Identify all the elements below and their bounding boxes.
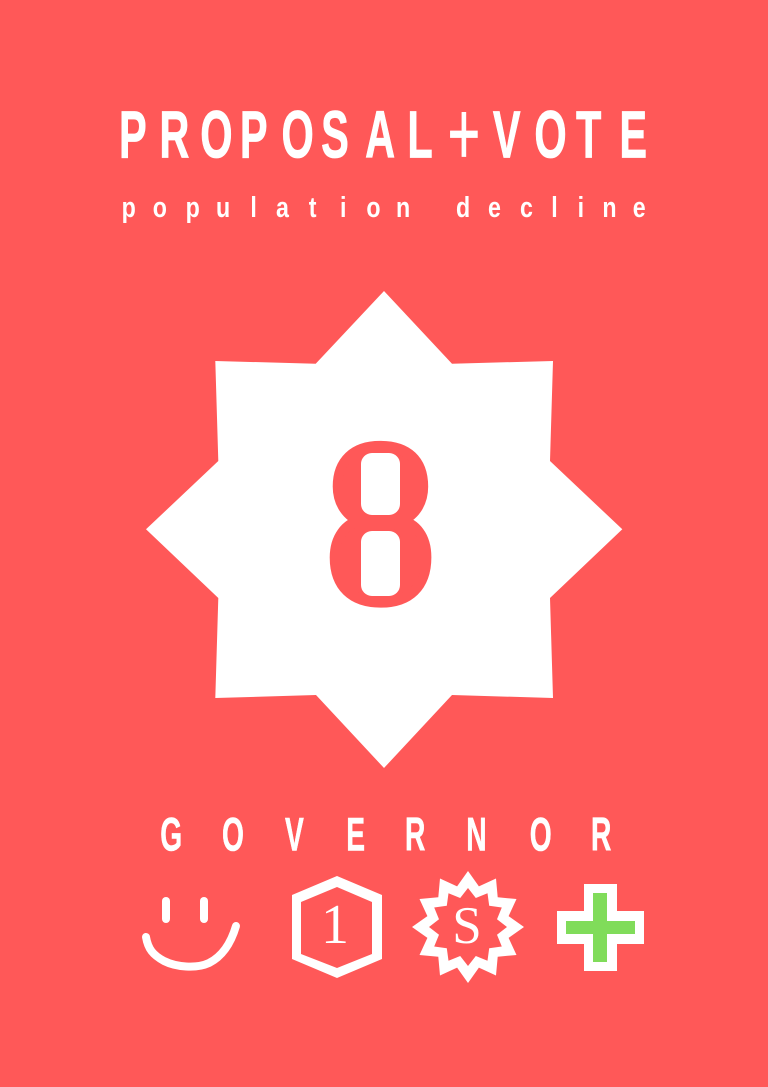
icon: green plus — [557, 884, 644, 971]
icon: smiley face — [146, 901, 236, 967]
title: VOTE — [493, 97, 647, 172]
icon: S starburst — [412, 871, 524, 983]
icon: numbered hexagon — [292, 876, 382, 978]
icon: numbered hexagon: 1 — [321, 894, 349, 956]
number 8: 8 — [328, 402, 432, 647]
title: PROPOSAL — [119, 97, 433, 172]
role label: GOVERNOR — [160, 809, 611, 862]
star badge — [146, 291, 622, 768]
title: + — [448, 83, 480, 184]
central eight-point star with number — [146, 291, 622, 768]
icon: S starburst: S — [452, 897, 482, 955]
subtitle: population decline — [122, 190, 646, 224]
